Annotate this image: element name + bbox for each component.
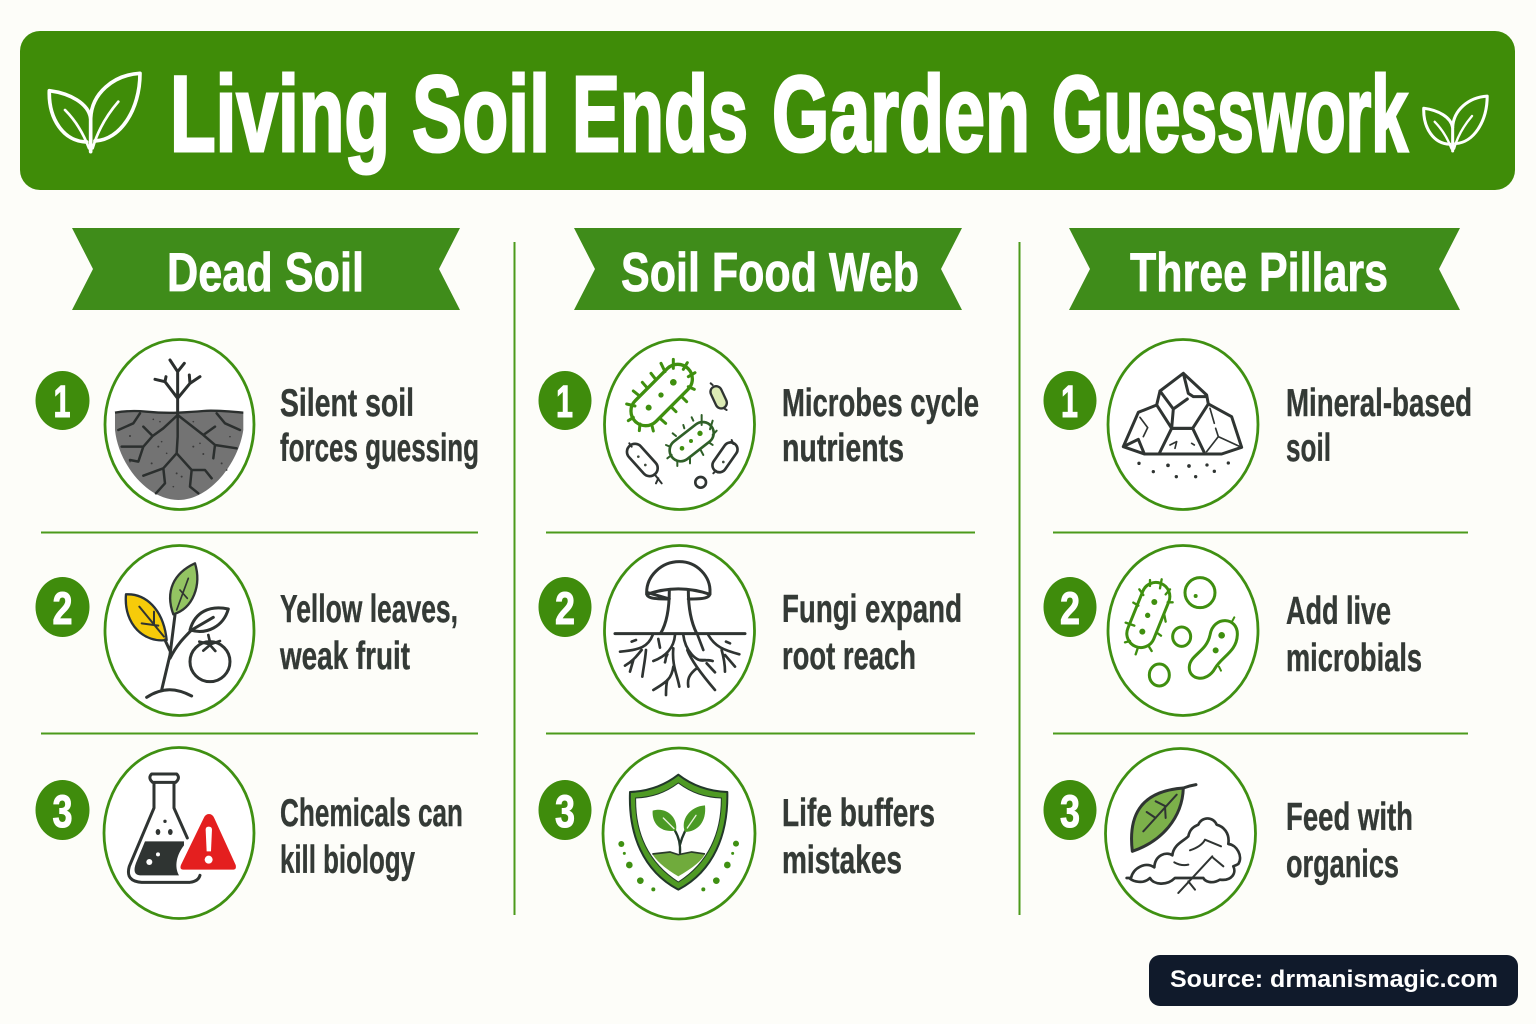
number badges bbox=[36, 371, 1096, 840]
icon: leaf and organics bbox=[1106, 748, 1256, 918]
text: column 3: Add live bbox=[1286, 590, 1391, 633]
heading: Soil Food Web bbox=[574, 228, 962, 310]
number badges: 3 bbox=[555, 786, 575, 837]
icon: fungi and roots bbox=[604, 546, 754, 716]
heading: Three Pillars: Three Pillars bbox=[1130, 241, 1388, 303]
text: column 3: soil bbox=[1286, 427, 1331, 470]
text: column 1: Chemicals can bbox=[280, 792, 463, 835]
text: column 3: microbials bbox=[1286, 637, 1422, 680]
number badges: 1 bbox=[556, 376, 573, 427]
source tag: Source: drmanismagic.com bbox=[1170, 966, 1498, 993]
column dividers bbox=[41, 242, 1468, 915]
text: column 2 bbox=[782, 382, 979, 882]
text: column 2: Fungi expand bbox=[782, 588, 962, 631]
text: column 1: forces guessing bbox=[280, 427, 479, 470]
title text: Ends bbox=[572, 53, 748, 174]
number badges: 3 bbox=[1060, 786, 1080, 837]
icon: left leaves bbox=[49, 73, 140, 152]
icon: microbes bbox=[604, 340, 754, 510]
text: column 3 bbox=[1286, 382, 1472, 886]
heading: Soil Food Web: Soil Food Web bbox=[621, 241, 919, 303]
text: column 1: weak fruit bbox=[279, 635, 410, 678]
number badges: 1 bbox=[54, 376, 70, 427]
number badges: 2 bbox=[52, 583, 72, 634]
title text: Living bbox=[170, 53, 390, 174]
title text: Soil bbox=[412, 53, 550, 174]
icon: live microbials bbox=[1108, 546, 1258, 716]
text: column 1: kill biology bbox=[280, 839, 415, 882]
text: column 2: mistakes bbox=[782, 839, 902, 882]
text: column 2: nutrients bbox=[782, 427, 904, 470]
icon: flask and warning bbox=[104, 748, 254, 918]
icon: mineral rocks bbox=[1108, 340, 1258, 510]
text: column 3: organics bbox=[1286, 843, 1399, 886]
title text: Garden bbox=[772, 53, 1030, 174]
icon: shield with sprout bbox=[603, 748, 755, 919]
text: column 2: Life buffers bbox=[782, 792, 935, 835]
text: column 1: Silent soil bbox=[280, 382, 414, 425]
number badges: 3 bbox=[52, 786, 72, 837]
number badges: 2 bbox=[1060, 583, 1080, 634]
title text bbox=[170, 53, 1409, 174]
icon: dead soil cross-section bbox=[105, 340, 254, 510]
heading: Dead Soil bbox=[72, 228, 460, 310]
text: column 2: Microbes cycle bbox=[782, 382, 979, 425]
icon: right leaves bbox=[1424, 96, 1487, 151]
source tag bbox=[1149, 955, 1518, 1006]
text: column 1 bbox=[279, 382, 479, 882]
heading: Three Pillars bbox=[1069, 228, 1460, 310]
number badges: 2 bbox=[555, 583, 575, 634]
text: column 1: Yellow leaves, bbox=[280, 588, 458, 631]
title banner bbox=[20, 31, 1515, 190]
text: column 2: root reach bbox=[782, 635, 916, 678]
heading: Dead Soil: Dead Soil bbox=[167, 241, 364, 303]
text: column 3: Feed with bbox=[1286, 796, 1413, 839]
icon: yellow leaf plant with tomato bbox=[105, 546, 254, 716]
number badges: 1 bbox=[1061, 376, 1078, 427]
